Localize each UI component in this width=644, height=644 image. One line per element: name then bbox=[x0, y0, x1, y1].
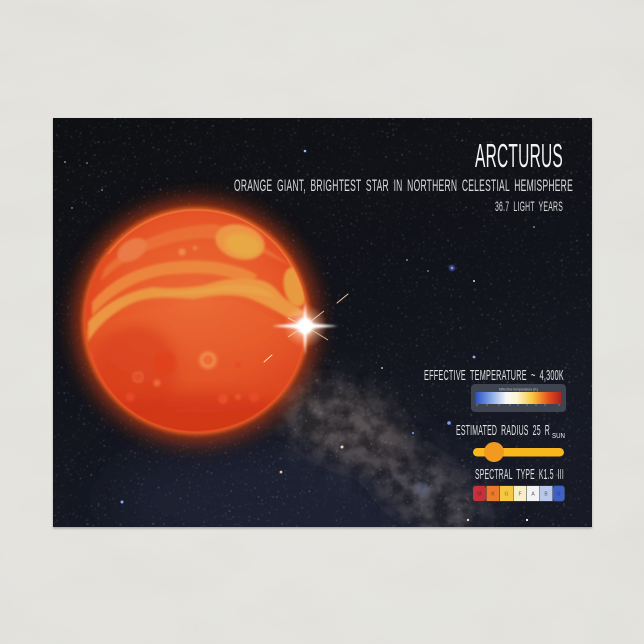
postcard infographic: Arcturus bbox=[52, 118, 594, 530]
temperature colour scale bbox=[471, 384, 566, 412]
large yellow storm bbox=[214, 223, 266, 261]
card shadow bbox=[53, 119, 592, 528]
spectral class scale: B bbox=[544, 492, 548, 498]
lens flare star bbox=[272, 301, 338, 355]
blue haze at lower sky bbox=[126, 441, 412, 527]
radius unit subscript: SUN bbox=[552, 431, 565, 440]
milky way clouds bbox=[274, 369, 496, 527]
lower rim bbox=[90, 345, 303, 432]
ring storm bbox=[198, 350, 218, 370]
planet Arcturus bbox=[85, 210, 310, 450]
bright centre of wide band bbox=[178, 285, 272, 296]
spectral class scale: G bbox=[505, 492, 509, 498]
panel: night sky: 36.7 LIGHT YEARS bbox=[495, 198, 563, 214]
star field bbox=[53, 118, 592, 527]
wide yellow band bbox=[88, 278, 306, 342]
thin yellow band bbox=[92, 261, 258, 316]
panel: night sky bbox=[53, 118, 592, 560]
radius slider bbox=[473, 442, 564, 462]
comet streaks bbox=[264, 294, 348, 362]
lower darker hemisphere bbox=[86, 324, 300, 370]
spectral class scale bbox=[472, 485, 565, 502]
rim highlight bbox=[108, 209, 294, 269]
right yellow storm bbox=[282, 266, 306, 308]
spectral class scale: M bbox=[477, 492, 482, 498]
milky way glow bbox=[281, 380, 430, 473]
planet glow bbox=[75, 200, 317, 442]
small ring storm bbox=[133, 372, 143, 382]
spectral class scale: A bbox=[531, 492, 535, 498]
spectral class scale: F bbox=[518, 492, 522, 498]
temperature colour scale: Effective temperature (K) bbox=[499, 388, 538, 392]
upper pale band bbox=[100, 224, 292, 282]
dark lower patch bbox=[98, 322, 178, 394]
spectral class scale: O bbox=[557, 492, 561, 498]
bright stars bbox=[64, 150, 535, 521]
left pale storm bbox=[116, 237, 146, 263]
small spots bbox=[126, 246, 259, 404]
bottom shade bbox=[131, 389, 267, 426]
spectral class scale: K bbox=[491, 492, 495, 498]
